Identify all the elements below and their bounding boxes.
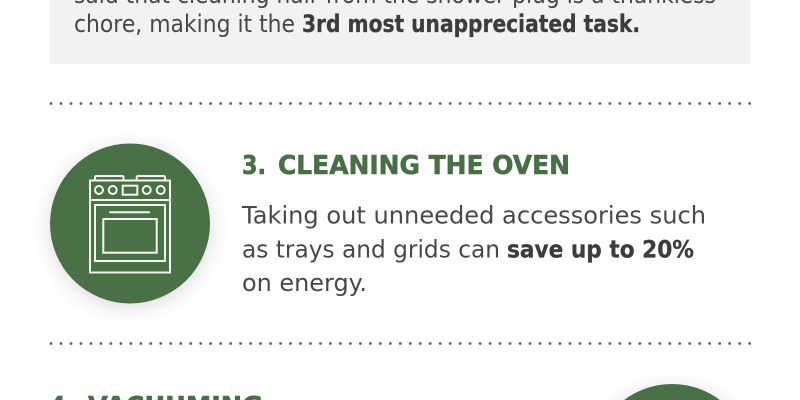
- callout text: chore, making it the: [74, 10, 295, 38]
- callout text: 3rd most unappreciated task.: [302, 10, 640, 38]
- panel: previous tip callout: [50, 0, 750, 64]
- text block: oven tip: Taking out unneeded accessories such: [241, 202, 706, 230]
- icon: oven: [50, 144, 210, 304]
- text block: oven tip: on energy.: [242, 269, 367, 297]
- text block: oven tip: as trays and grids can: [242, 236, 500, 264]
- heading: cleaning the oven: 3.: [242, 151, 266, 181]
- panel: tip 3 cleaning the oven: [50, 144, 706, 304]
- text block: oven tip: [241, 202, 706, 297]
- callout text: [74, 0, 716, 38]
- heading: cleaning the oven: CLEANING THE OVEN: [278, 151, 570, 181]
- icon: vacuum circle: [592, 384, 752, 400]
- text block: oven tip: save up to 20%: [507, 236, 694, 264]
- panel: tip 4 vacuuming: [50, 384, 752, 400]
